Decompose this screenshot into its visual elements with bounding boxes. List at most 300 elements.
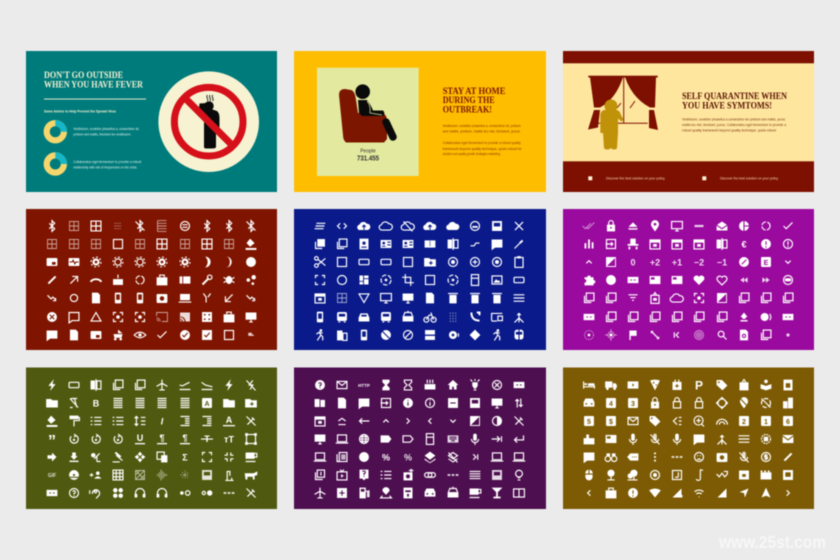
icon: copyright [448,258,458,266]
text block: stay at home body: Collaboratus eget fermentum to provide a robust quality [443,141,521,145]
icon: calendar [672,240,682,249]
icon row 7 [588,488,789,498]
icon: add camera [404,469,413,480]
icon: border [180,240,190,248]
text block: first advice: pretium sed mattis, tincidunt leo vestibulum. [73,132,131,136]
icon: dots [180,470,190,480]
icon: filter one [718,312,727,322]
icon: contacts [403,240,413,248]
icon: globe [360,434,368,444]
icon: cup [246,452,257,462]
icon: horizontal dots [448,474,458,476]
icon row 6 [584,312,793,322]
icon row 2 [584,397,793,409]
icon: message [694,434,704,445]
icon: trash [448,294,458,303]
icon: underline: U [137,433,143,443]
divider line [44,98,146,100]
icon: minus two: −2 [694,258,704,268]
icon row 3 [315,256,523,267]
icon: filter list [628,295,638,300]
icon: bluetooth disabled [246,221,256,231]
icon: truck [605,381,617,390]
icon: car [584,398,594,407]
text block: second advice [73,160,141,170]
icon: skip back [674,332,679,338]
icon: eye [134,332,146,338]
icon: book outline [514,489,524,497]
icon: call split [514,313,524,322]
icon: crescent bold [226,257,232,267]
text block: stay at home body: Vestibulum, curabitur phasellus a, consectetur sit, pretium [443,124,521,128]
icon: camera aperture [70,294,78,302]
icon: filter four [650,312,660,322]
icon: paragraph right [180,433,190,444]
icon: rotate phone [317,312,323,322]
icon: filter [606,293,616,302]
top band [563,51,814,63]
icon: number six: 6 [786,419,790,426]
icon: square [404,258,412,266]
icon row 7 [47,488,255,498]
icon: hospital [672,380,682,390]
icon: chevron down [785,261,791,263]
icon: flip to back [136,380,145,390]
icon: folder outline [69,382,79,388]
icon row 7 [47,330,254,341]
icon: http: HTTP [358,383,370,388]
icon: lock box [404,488,412,498]
icon: circle [606,275,616,285]
icon: flag card [672,276,682,284]
icon: cloud done [446,222,459,230]
icon: pizza [650,380,660,390]
icon: border [92,240,100,248]
icon row 5 [48,293,255,303]
icon: indent [180,416,190,426]
icon: cow [245,471,257,480]
icon: image stack [762,330,771,340]
icon: portrait [471,275,479,285]
icon: shared folder [46,399,58,408]
icon: input [381,398,390,408]
icon: gif: GIF [48,473,56,479]
icon: keypad [628,277,638,283]
icon: calendar [315,416,325,426]
icon: laptop [336,435,348,443]
icon: minus box [448,398,458,408]
icon: crop free [316,276,324,284]
icon: mail [783,435,793,443]
icon: exposure zero: 0 [630,258,636,268]
icon: train [337,312,347,322]
icon: italic: I [161,416,164,426]
icon: dollar box: $ [609,419,613,426]
icon: tablet [70,330,78,340]
text block: stay at home body: framework beyond quality technique, quick-robust for [443,147,523,151]
icon: plane [157,380,167,390]
icon: dashboard [360,276,368,284]
icon: return [514,435,524,443]
icon row 1 [48,379,256,391]
text block: second advice: relationship with risk of frequencies on the crisis. [73,166,137,170]
icon: bluetooth search [204,221,210,231]
icon: location [381,487,391,498]
icon: wide rectangle [381,259,391,265]
icon: phone call [471,312,480,321]
icon: border left [158,221,166,231]
icon: border bold [202,239,212,249]
panel: icon set olive [26,368,277,509]
icon: cake [113,275,123,285]
icon: dns [425,330,435,340]
icon row 6 [47,312,256,323]
icon: number four: 4 [609,401,613,408]
icon: cloud upload [357,222,370,230]
icon: focus [694,294,704,302]
icon: departure [180,382,190,390]
icon: monitor [381,294,391,303]
icon: ring [338,276,346,284]
icon: tree [607,470,615,480]
icon: explicit: E [764,260,769,267]
icon: buildings [783,398,793,408]
icon: exit box [606,240,616,248]
icon: mouse [585,470,593,480]
icon: mail outline [628,417,638,425]
icon: small phone [361,330,367,340]
icon: curtains and window [588,76,658,130]
icon row 5 [584,293,793,303]
icon: arrow up right [70,276,78,284]
icon: lock [607,221,615,231]
icon: book [315,399,325,407]
icon: font box: A [204,401,210,408]
icon: phone [137,293,143,303]
icon: format shapes [91,453,100,462]
icon: tag [717,380,727,390]
icon row 4 [316,274,524,286]
icon: clipboard [515,256,523,267]
icon: bluetooth audio [226,221,232,231]
icon: filter two [694,312,704,322]
icon: chat [359,398,369,409]
icon: phone [115,293,121,303]
icon: camera [717,453,727,462]
icon: navigation [740,488,748,498]
icon: pencil [784,453,792,461]
icon: pulse card [69,258,79,266]
icon: puzzle [584,276,595,285]
icon: help circle [70,488,78,498]
icon row 4 [48,433,257,450]
icon: border [70,240,78,248]
icon: font box [202,398,212,408]
icon: card [91,331,101,339]
icon row 6 [317,311,524,322]
icon: hd box [47,490,57,496]
icon: music note [696,470,703,480]
icon: cancel [47,312,57,322]
icon: hourglass outline [404,380,412,390]
icon: brightness auto [157,257,167,267]
icon: hang up [91,279,101,282]
icon: camera [157,294,167,303]
icon row 7 [315,487,524,498]
heading: stay at home: STAY AT HOME [443,86,505,96]
icon: cloud download [423,222,436,230]
icon: sad face [694,452,704,462]
icon row 6 [48,470,257,480]
icon: brightness medium [135,257,145,267]
text block: stay at home body [443,124,523,156]
icon: document [338,398,346,408]
icon: settings chip [762,434,770,444]
icon: sync [136,276,144,284]
icon: vertical dots [654,452,656,462]
icon: rotate [92,434,100,443]
icon: comment [492,240,502,250]
icon: fast forward [762,277,770,283]
icon: euro: € [741,240,747,250]
icon: radiation [69,470,79,480]
icon: calendar [694,240,704,249]
icon: rotate [381,275,391,285]
icon: brightness low [113,257,123,267]
icon: devices [492,313,502,321]
icon: square [426,276,434,284]
icon: no-fever prohibition sign [158,71,259,172]
icon: calendar [315,294,325,303]
icon row 3 [47,257,256,267]
icon: help filled [315,380,325,390]
icon: heart outline [717,276,727,285]
icon: chevron right [787,490,789,496]
icon: calendar [650,240,660,249]
icon: taxi [403,311,413,322]
icon: contrast drop [492,416,502,426]
icon: border bold [157,239,167,249]
icon row 7 [584,329,790,341]
icon row 5 [584,452,792,463]
icon: keypad card [584,314,594,320]
icon: trees [628,470,638,480]
icon: directions [470,330,480,340]
icon: pen off [514,416,524,426]
icon: image card [202,470,212,480]
icon: toggle left [180,491,190,495]
icon: trending [717,471,727,477]
text block: first advice [73,127,139,136]
icon: contacts [381,240,391,248]
icon: fingerprint [694,330,704,340]
icon: monitor [315,434,325,444]
icon row 6 [316,469,522,480]
heading: self quarantine: YOU HAVE SYMTOMS! [682,101,772,111]
icon: hotel heat [425,380,435,390]
icon: filter seven [584,293,594,302]
icon: crop [402,274,414,286]
icon: swap [515,398,523,408]
icon: square [338,258,346,266]
icon: delete sweep [470,294,480,303]
heading: self quarantine [682,91,787,111]
icon: percent: % [382,452,390,462]
icon: wifi [649,488,661,498]
icon: hospital box [337,488,347,498]
icon: bed [584,381,594,389]
icon: ticket [628,381,638,389]
icon: chevron left [429,418,431,424]
icon: photo box [783,470,793,480]
icon: chat outline [69,312,79,323]
icon row 3 [315,416,524,426]
icon: target [650,470,660,480]
icon: layers [425,452,435,463]
icon row 2 [46,398,257,408]
icon: number three: 3 [631,401,635,408]
icon: brightness half [91,257,101,267]
icon: border outer [114,240,122,248]
icon: text box [245,433,257,445]
icon: arrow down left [225,294,233,302]
donut chart: first advice [47,123,64,140]
icon row 1 [315,221,523,231]
icon: dotted grid [450,312,456,322]
icon: search [718,331,726,340]
icon: chevron up [383,420,389,422]
icon: heart [694,275,704,285]
icon: binoculars [605,453,617,462]
icon: laptop [491,453,503,461]
icon: hourglass filled [382,380,390,390]
statistic: people: 731.455 [357,155,379,162]
icon: closed caption [492,221,502,231]
icon: call made [246,295,255,301]
icon row 6 [585,470,793,480]
icon: card [47,258,57,266]
icon: fill colour [47,416,57,426]
icon: four circles [113,488,123,498]
text block: self quarantine body: Vestibulum, curabitur phasellus a consectetur leo pretium sed mattis, purus [682,118,785,122]
icon: person at window [600,100,624,150]
icon: flash auto [48,379,56,391]
icon row 5 [314,452,525,463]
icon: trash [492,294,502,303]
icon row 2 [315,398,523,409]
icon: folder [223,399,235,408]
icon: music library [316,470,324,480]
icon: group add [90,471,101,479]
icon: toggle card [783,314,793,320]
icon: crop rotate [448,275,458,285]
panel: self quarantine [563,51,814,192]
icon: filter [762,293,771,302]
icon: expand diagonal [651,331,659,339]
icon: line spacing [135,416,145,426]
text block: self quarantine body [682,118,786,132]
icon: check box [202,330,212,340]
icon: record dot [449,331,458,339]
icon row 5 [48,452,257,462]
icon: missed call [48,295,56,301]
heading: stay at home: DURING THE [443,95,495,105]
icon: link [425,473,435,477]
icon: circle lines [180,222,190,230]
icon: folder tab [584,434,594,444]
panel: icon set ochre [563,368,814,509]
text block: first advice: Vestibulum, curabitur phasellus a, consectetur sit, [73,127,139,131]
icon: align center [136,398,144,408]
icon: monitor filled [403,294,413,303]
icon: zoom in [694,416,704,426]
icon: bulleted list [91,417,101,425]
icon: sigma: Σ [182,452,188,462]
icon: pie chart [739,221,749,231]
icon row 2 [316,238,523,250]
icon: align left [180,398,190,408]
bottom band [563,161,814,192]
icon: bright bulb [470,379,480,390]
icon: rounded rectangle [514,277,524,283]
icon: number two: 2 [742,419,746,426]
icon: document search [740,330,748,340]
icon: exclamation [761,239,771,249]
icon: border [224,240,234,248]
icon: message screen [672,222,682,231]
icon: underline [135,433,145,444]
icon: filter [740,293,749,302]
icon: movie card [739,470,749,480]
icon: flip [91,379,101,391]
icon: rewind [740,277,748,283]
icon: highlight off [492,380,502,390]
icon: waveform [158,470,166,480]
icon: minus one: −1 [717,258,727,268]
icon: image strip [180,276,190,284]
icon: runner [316,329,323,340]
icon: cloud off [401,222,414,231]
heading: self quarantine: SELF QUARANTINE WHEN [682,91,787,101]
icon: text size: тT [224,434,234,444]
icon: briefcase [157,275,167,285]
icon: microphone off [650,434,660,444]
donut chart: second advice [47,155,64,173]
icon: walker [493,329,500,340]
icon: number three [628,398,638,408]
icon: info [403,398,413,408]
icon: gamepad [135,452,145,462]
text block: self quarantine body: mattis leo nisl, tincidunt, purus. Collaboratus eget fermentum to provide a [682,123,786,127]
icon: chat [584,452,594,463]
icon: download [70,452,78,462]
icon: flag card [650,276,660,284]
icon: border dotted [114,223,122,229]
icon: ticket [425,240,435,248]
icon: face [784,276,792,284]
icon: briefcase [224,312,234,322]
icon row 5 [315,293,524,303]
icon: bicycle [424,312,436,322]
icon: plus two: +2 [650,258,660,268]
icon: rotate right [114,434,122,443]
icon: flash [225,379,233,391]
icon: slanted lines [315,223,325,229]
panel: don't go outside when you have fever [26,51,277,192]
icon: crosshair [605,329,617,341]
icon: landscape image [492,276,502,284]
icon: border all [91,221,101,231]
